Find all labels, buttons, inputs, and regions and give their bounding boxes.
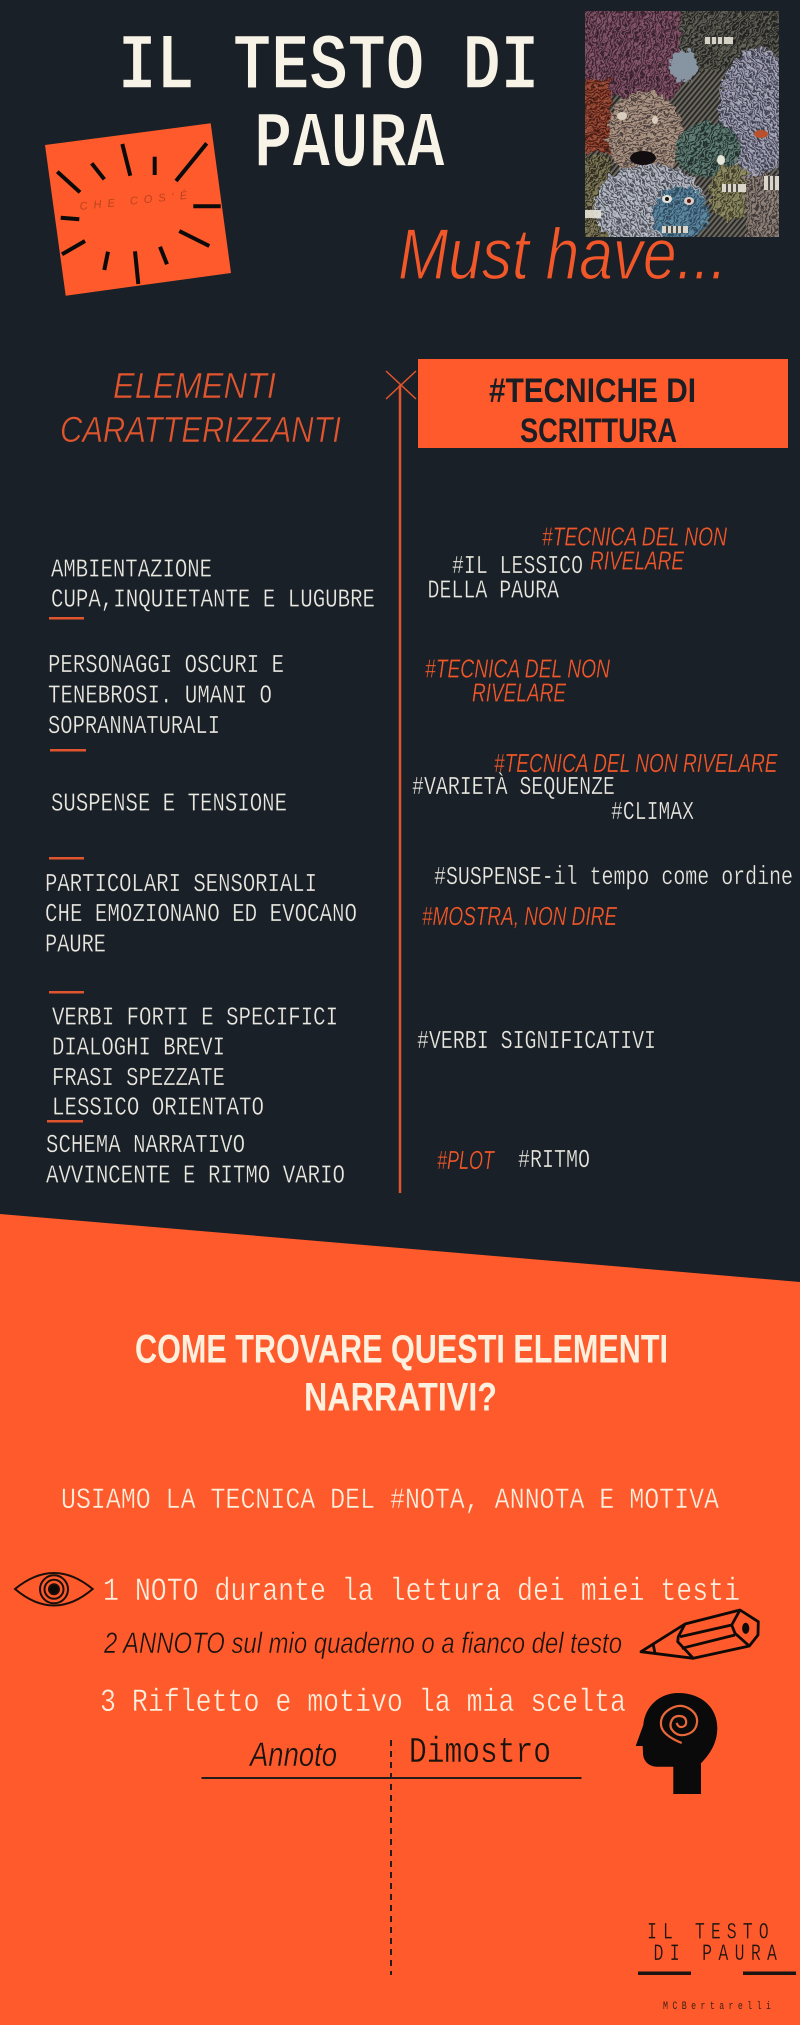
technique: lessico della paura: #TECNICA DEL NON (542, 522, 727, 552)
heading: come trovare questi elementi narrativi (135, 1328, 668, 1420)
technique: lessico della paura (428, 522, 727, 606)
panel: che cos'è burst card: CHE COS'É (79, 189, 188, 213)
item: particolari sensoriali (45, 869, 357, 994)
panel: tecniche di scrittura (418, 359, 788, 450)
technique: plot e ritmo: #PLOT (437, 1145, 495, 1175)
item: ambientazione: CUPA,INQUIETANTE E LUGUBRE (51, 584, 375, 614)
technique: plot e ritmo: #RITMO (518, 1145, 590, 1175)
central divider with cross (386, 371, 416, 1193)
heading: elementi caratterizzanti: CARATTERIZZANTI (60, 409, 341, 450)
item: verbi forti: VERBI FORTI E SPECIFICI (52, 1002, 338, 1032)
technique: non rivelare: #TECNICA DEL NON (425, 654, 610, 684)
author credit: MCBertarelli (663, 2000, 771, 2012)
main title (118, 22, 539, 191)
item: schema narrativo: SCHEMA NARRATIVO (46, 1130, 245, 1160)
main title: IL TESTO DI (118, 22, 539, 113)
heading: elementi caratterizzanti: ELEMENTI (113, 365, 276, 406)
technique: non rivelare (425, 654, 610, 708)
orange lower panel (0, 1214, 800, 2025)
technique: suspense e mostra: #MOSTRA, NON DIRE (422, 901, 617, 931)
technique: lessico della paura: RIVELARE (590, 546, 684, 576)
technique: suspense e mostra (422, 862, 793, 931)
item: schema narrativo (46, 1130, 345, 1190)
item: ambientazione (49, 554, 375, 620)
item: verbi forti (47, 1002, 338, 1122)
panel: che cos'è burst card (45, 123, 231, 296)
footer brand: il testo di paura (638, 1920, 796, 1975)
footer brand: il testo di paura: DI PAURA (654, 1942, 778, 1968)
table: annoto e dimostro (202, 1732, 582, 1975)
technique: lessico della paura: #IL LESSICO (452, 551, 583, 581)
list: elementi caratterizzanti (45, 554, 375, 1190)
picture: painted monstrous faces (585, 11, 779, 237)
icon: eye (15, 1573, 93, 1606)
item: personaggi: SOPRANNATURALI (48, 711, 220, 741)
step 2: 2 ANNOTO sul mio quaderno o a fianco del testo (103, 1627, 622, 1660)
technique: plot e ritmo (437, 1145, 590, 1175)
heading: elementi caratterizzanti (60, 365, 341, 450)
item: particolari sensoriali: PAURE (45, 930, 106, 960)
item: particolari sensoriali: PARTICOLARI SENSORIALI (45, 869, 317, 899)
main title: PAURA (254, 100, 446, 191)
footer brand: il testo di paura: IL TESTO (647, 1920, 769, 1947)
item: verbi forti: FRASI SPEZZATE (52, 1063, 225, 1093)
panel: tecniche di scrittura: SCRITTURA (520, 412, 677, 450)
technique: lessico della paura: DELLA PAURA (428, 576, 559, 606)
table: annoto e dimostro: Dimostro (409, 1732, 551, 1773)
item: personaggi: PERSONAGGI OSCURI E (48, 650, 284, 680)
item: verbi forti: DIALOGHI BREVI (52, 1032, 225, 1062)
item: personaggi (48, 650, 284, 752)
mouth and eyes details (630, 151, 656, 165)
subtitle: must have: Must have... (398, 215, 727, 295)
item: ambientazione: AMBIENTAZIONE (51, 554, 212, 584)
panel: tecniche di scrittura: #TECNICHE DI (489, 372, 696, 410)
technique: varietà sequenze e climax: #CLIMAX (611, 797, 694, 827)
table: annoto e dimostro: Annoto (248, 1736, 337, 1774)
icon: pencil (641, 1610, 758, 1658)
item: particolari sensoriali: CHE EMOZIONANO ED EVOCANO (45, 899, 357, 929)
item: personaggi: TENEBROSI. UMANI O (48, 680, 272, 710)
icon: head with spiral (636, 1693, 717, 1794)
technique: varietà sequenze e climax: #VARIETÀ SEQUENZE (412, 772, 615, 802)
step 3: 3 Rifletto e motivo la mia scelta (100, 1684, 626, 1721)
item: verbi forti: LESSICO ORIENTATO (52, 1092, 264, 1122)
heading: come trovare questi elementi narrativi: NARRATIVI? (304, 1376, 497, 1420)
technique: varietà sequenze e climax (412, 748, 778, 827)
item: suspense: SUSPENSE E TENSIONE (51, 788, 287, 818)
list: tecniche (412, 522, 793, 1175)
item: schema narrativo: AVVINCENTE E RITMO VARIO (46, 1160, 345, 1190)
technique: non rivelare: RIVELARE (472, 678, 566, 708)
technique: verbi significativi: #VERBI SIGNIFICATIVI (417, 1026, 656, 1056)
